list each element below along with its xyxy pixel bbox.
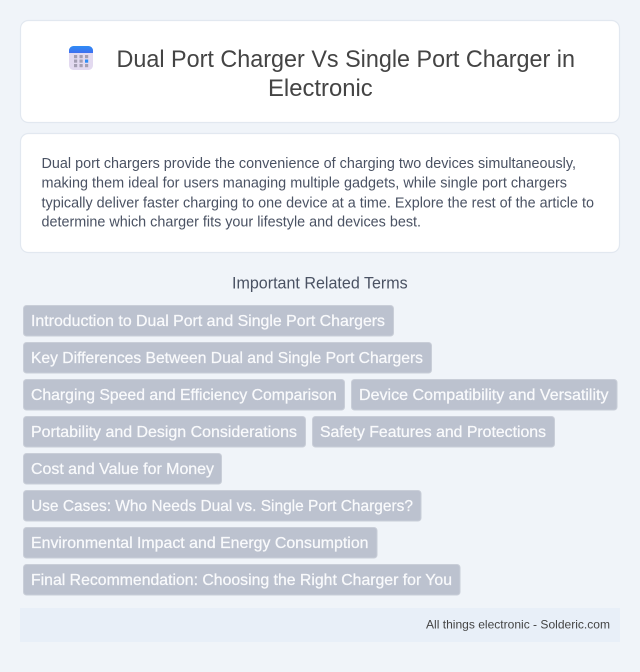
- tag: key differences: [24, 342, 432, 373]
- footer bar: [20, 608, 620, 642]
- text block: introduction: [42, 155, 594, 230]
- tag: final recommendation: [24, 564, 460, 595]
- tag: portability: Portability and Design Considerations: [31, 424, 297, 441]
- tag: introduction: [24, 306, 394, 336]
- tag: safety features: Safety Features and Protections: [320, 424, 546, 441]
- tag: final recommendation: Final Recommendation: Choosing the Right Charger for You: [31, 572, 452, 589]
- tag: cost and value: Cost and Value for Money: [31, 461, 214, 478]
- footer text: All things electronic - Solderic.com: [426, 618, 610, 632]
- tag: use cases: Use Cases: Who Needs Dual vs. Single Port Chargers?: [31, 498, 413, 515]
- title: Electronic: [268, 75, 373, 102]
- tag: cost and value: [24, 454, 222, 484]
- tag: introduction: Introduction to Dual Port and Single Port Chargers: [31, 313, 385, 330]
- tag: use cases: [24, 490, 421, 521]
- icon: calendar: [69, 46, 93, 70]
- tag: safety features: [312, 416, 554, 447]
- tag: environmental impact: [24, 528, 377, 558]
- title: Dual Port Charger Vs Single Port Charger in: [116, 46, 575, 73]
- tag: device compatibility: [352, 380, 617, 410]
- tag: environmental impact: Environmental Impact and Energy Consumption: [31, 535, 368, 552]
- text block: introduction: determine which charger fits your lifestyle and devices best.: [42, 214, 421, 230]
- tag: charging speed: Charging Speed and Efficiency Comparison: [31, 387, 337, 404]
- tag: charging speed: [24, 380, 344, 410]
- tag: key differences: Key Differences Between Dual and Single Port Chargers: [31, 350, 423, 367]
- panel: introduction text: [20, 134, 620, 252]
- text block: introduction: making them ideal for users managing multiple gadgets, while single port chargers: [42, 174, 567, 192]
- panel: related terms tags: [24, 306, 617, 595]
- title: [116, 46, 575, 102]
- tag: portability: [24, 416, 306, 447]
- tag: device compatibility: Device Compatibility and Versatility: [359, 387, 608, 404]
- text block: introduction: Dual port chargers provide the convenience of charging two devices simultaneously,: [42, 155, 576, 172]
- text block: introduction: typically deliver faster charging to one device at a time. Explore the rest of the article to: [42, 194, 594, 212]
- panel: title card: [20, 20, 620, 122]
- heading: important related terms: Important Related Terms: [232, 274, 408, 292]
